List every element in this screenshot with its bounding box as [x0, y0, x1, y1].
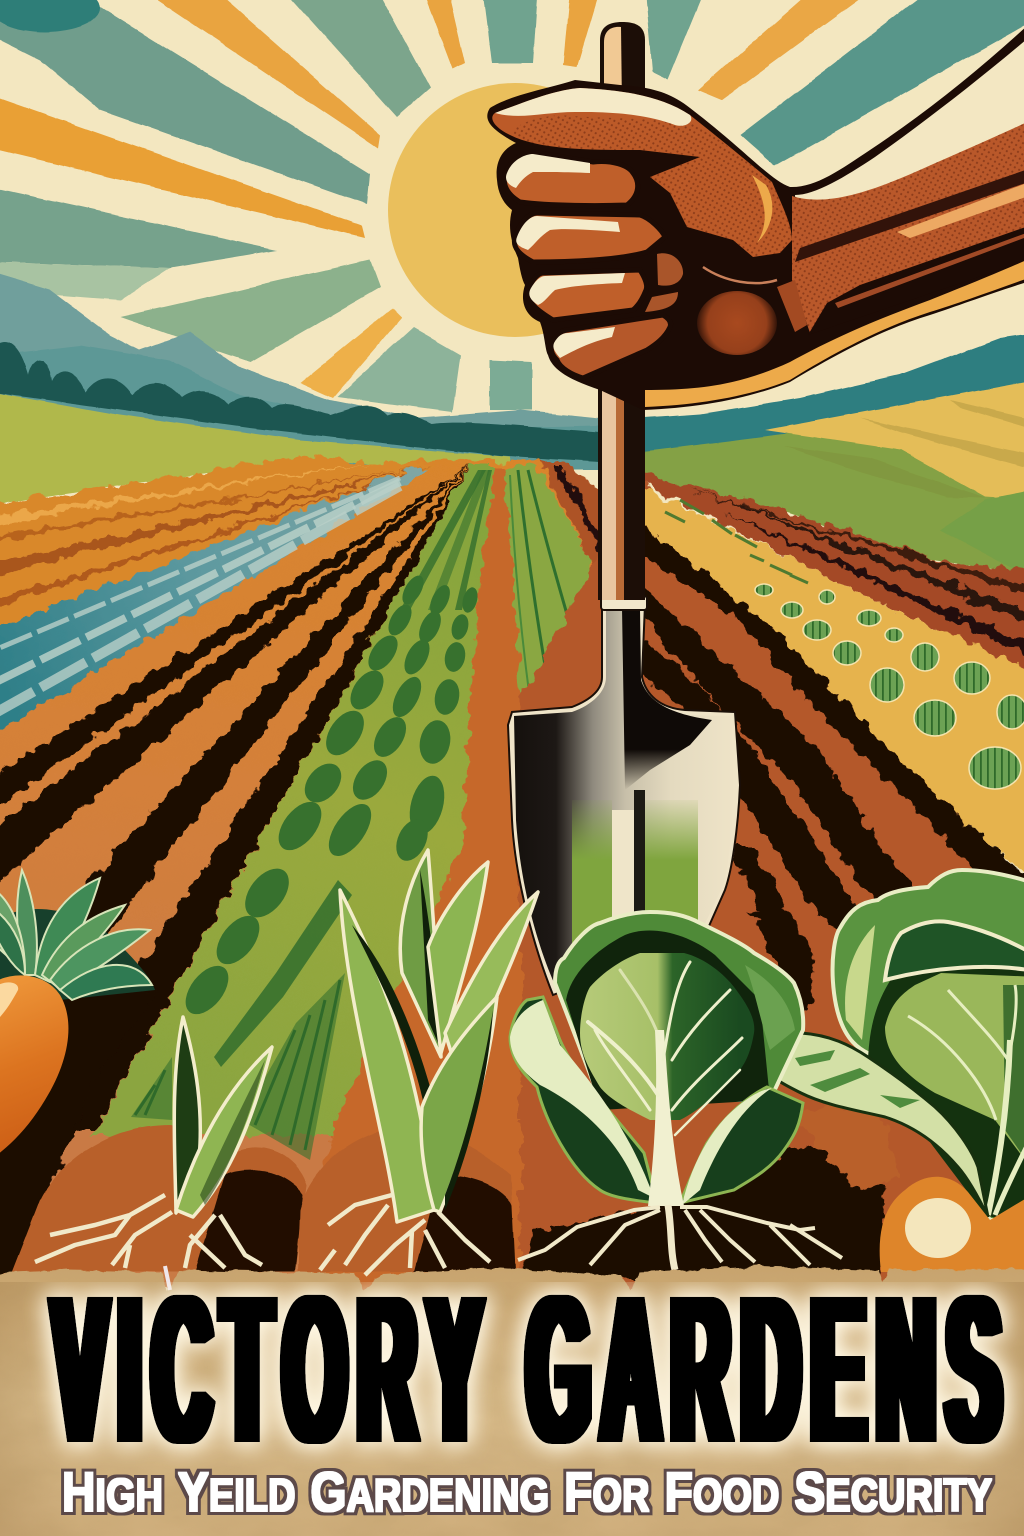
right mountain	[645, 333, 1024, 462]
front leaf	[767, 1033, 988, 1217]
grass hatching near shoots	[135, 980, 340, 1150]
inner cap	[885, 921, 1024, 980]
centre orange path	[300, 466, 560, 1290]
soil mounds	[12, 1125, 515, 1272]
forearm shadows	[808, 222, 1024, 335]
forearm halftone	[792, 116, 1024, 333]
stalk	[648, 1030, 684, 1206]
carrot highlight	[905, 1198, 971, 1258]
small knuckles	[645, 253, 683, 312]
subtitle: High Yeild Gardening For Food Security	[62, 1451, 992, 1525]
paper texture	[0, 1282, 1024, 1536]
blue field highlights	[0, 478, 400, 716]
orange grain field	[0, 456, 435, 640]
little finger	[551, 315, 671, 378]
ring finger	[528, 270, 647, 320]
head	[580, 953, 754, 1120]
scattered seedlings at far end of yellow band	[665, 500, 808, 583]
shovel	[508, 596, 740, 995]
lower right leaf	[680, 1087, 803, 1203]
head	[885, 973, 1024, 1180]
right green and yellow hills	[640, 380, 1024, 580]
blue field	[0, 468, 428, 742]
cream upper forearm	[795, 28, 1024, 260]
crop rows on the left green bed	[131, 470, 492, 1160]
dark soil by cabbage	[520, 1140, 885, 1280]
index finger	[504, 152, 638, 206]
foreground soil	[0, 985, 900, 1280]
far right green bed crop lines	[510, 470, 590, 705]
hand and forearm gripping the handle	[487, 14, 1024, 410]
torn paper banner	[0, 1266, 1024, 1536]
tree line	[0, 342, 600, 462]
inner shadow	[868, 955, 1024, 1230]
lettuce rows on the yellow band	[755, 584, 1024, 789]
dark teal corner of sky	[0, 0, 100, 32]
title: VICTORY GARDENS	[53, 1254, 1012, 1486]
wrist band	[777, 280, 807, 332]
distant mountains and tree line, left	[0, 272, 620, 470]
cabbage, centre	[510, 912, 842, 1270]
paper tear mark	[165, 1266, 170, 1290]
cabbage, right (back)	[767, 870, 1024, 1230]
right of path: green bed and far brown rows	[505, 462, 610, 712]
base soil	[0, 460, 1024, 1290]
hood	[555, 912, 803, 1100]
veins	[908, 985, 1024, 1215]
lower palm	[697, 291, 777, 355]
neck and centre shadow	[622, 608, 712, 790]
outer hood	[833, 870, 1024, 1220]
shovel handle	[598, 22, 645, 600]
reflected green on blade	[572, 800, 612, 945]
palm crease	[703, 267, 777, 283]
middle finger	[514, 213, 665, 262]
shovel blade	[508, 604, 740, 995]
carrot, left	[0, 870, 155, 1160]
roots of the shoots	[35, 1195, 490, 1275]
right fields: brown band, yellow band and furrows	[520, 474, 1024, 1290]
green bed	[93, 466, 497, 1135]
carrot, bottom right	[880, 1177, 1024, 1272]
orange under-arm band	[645, 254, 1024, 407]
dark soil around carrot	[0, 985, 158, 1275]
left green hill	[0, 392, 510, 505]
furrows	[0, 466, 470, 820]
sun disc	[388, 83, 642, 337]
carrot root	[0, 975, 68, 1160]
thumb highlight	[495, 88, 691, 126]
carrot foliage	[0, 870, 155, 1000]
back of hand halftone	[510, 115, 792, 257]
forearm	[792, 116, 1024, 333]
arm silhouette	[487, 14, 1024, 410]
collar	[601, 596, 647, 610]
cabbage roots	[518, 1205, 842, 1270]
sun rays	[0, 0, 1024, 412]
shoot one	[174, 1017, 272, 1217]
veins	[588, 962, 742, 1135]
lower left leaf	[510, 997, 657, 1203]
field rows, left of the handle	[0, 456, 1024, 1290]
shoot two	[340, 850, 538, 1222]
back of hand	[492, 88, 792, 257]
thumb muscle highlight	[752, 175, 772, 243]
